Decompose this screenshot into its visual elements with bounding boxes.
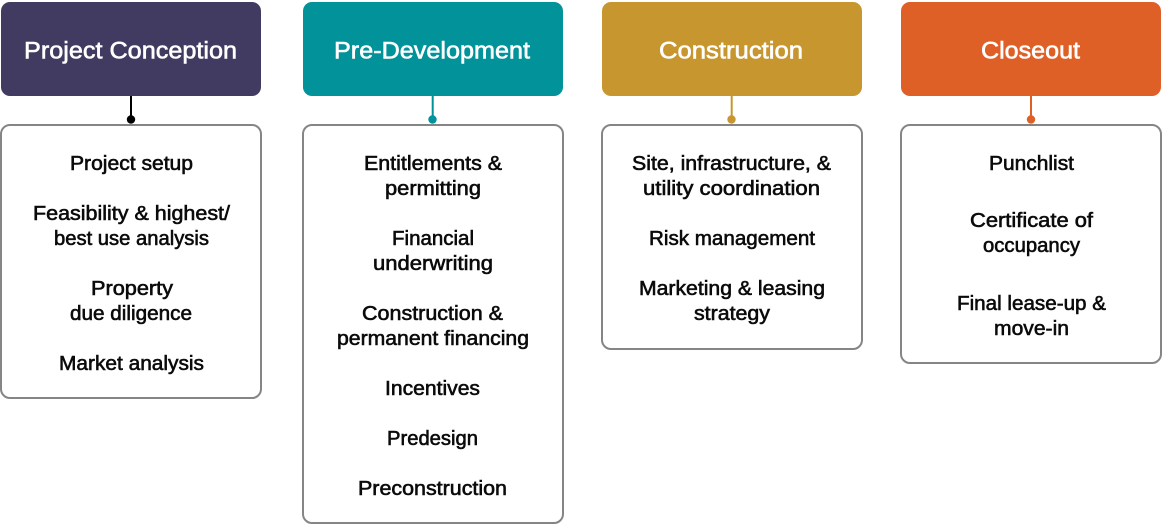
panel: Construction tasks xyxy=(602,125,862,349)
panel: Construction tasks: Marketing & leasing xyxy=(639,278,825,300)
header: Project Conception: Project Conception xyxy=(24,38,237,64)
panel: Closeout tasks: Certificate of xyxy=(970,210,1093,232)
connector: Project Conception xyxy=(127,96,135,124)
panel: Closeout tasks: Punchlist xyxy=(989,153,1074,175)
header: Pre-Development xyxy=(303,2,563,96)
header: Construction: Construction xyxy=(659,38,803,64)
panel: Pre-Development tasks: Incentives xyxy=(385,378,480,400)
panel: Closeout tasks: move-in xyxy=(994,318,1069,340)
panel: Project Conception tasks: Property xyxy=(91,278,173,300)
panel: Pre-Development tasks xyxy=(303,125,563,523)
connector: Closeout xyxy=(1027,96,1035,124)
column: Closeout xyxy=(901,2,1161,363)
panel: Pre-Development tasks: underwriting xyxy=(373,253,493,275)
panel: Pre-Development tasks: Predesign xyxy=(387,428,478,450)
panel: Project Conception tasks: Feasibility & highest/ xyxy=(33,203,230,225)
panel: Project Conception tasks: Market analysis xyxy=(59,353,204,375)
header: Closeout xyxy=(901,2,1161,96)
panel: Pre-Development tasks: permitting xyxy=(385,178,481,200)
panel: Pre-Development tasks: Construction & xyxy=(362,303,504,325)
panel: Construction tasks: strategy xyxy=(694,303,770,325)
panel: Closeout tasks xyxy=(901,125,1161,363)
panel: Project Conception tasks xyxy=(1,125,261,398)
panel: Closeout tasks: occupancy xyxy=(983,235,1080,257)
panel: Pre-Development tasks: permanent financing xyxy=(337,328,529,350)
panel: Pre-Development tasks: Financial xyxy=(392,228,474,250)
column: Project Conception xyxy=(1,2,261,398)
header: Project Conception xyxy=(1,2,261,96)
connector: Pre-Development xyxy=(428,96,437,124)
header: Pre-Development: Pre-Development xyxy=(334,38,530,64)
panel: Project Conception tasks: best use analysis xyxy=(54,228,209,250)
panel: Project Conception tasks: Project setup xyxy=(70,153,193,175)
connector: Construction xyxy=(727,96,736,124)
panel: Construction tasks: Site, infrastructure, & xyxy=(632,153,832,175)
panel: Pre-Development tasks: Entitlements & xyxy=(364,153,503,175)
column: Pre-Development xyxy=(303,2,563,523)
panel: Closeout tasks: Final lease-up & xyxy=(957,293,1107,315)
header: Construction xyxy=(602,2,862,96)
column: Construction xyxy=(602,2,862,349)
header: Closeout: Closeout xyxy=(981,38,1080,64)
panel: Pre-Development tasks: Preconstruction xyxy=(358,478,507,500)
panel: Construction tasks: Risk management xyxy=(649,228,815,250)
panel: Construction tasks: utility coordination xyxy=(643,178,820,200)
panel: Project Conception tasks: due diligence xyxy=(70,303,192,325)
